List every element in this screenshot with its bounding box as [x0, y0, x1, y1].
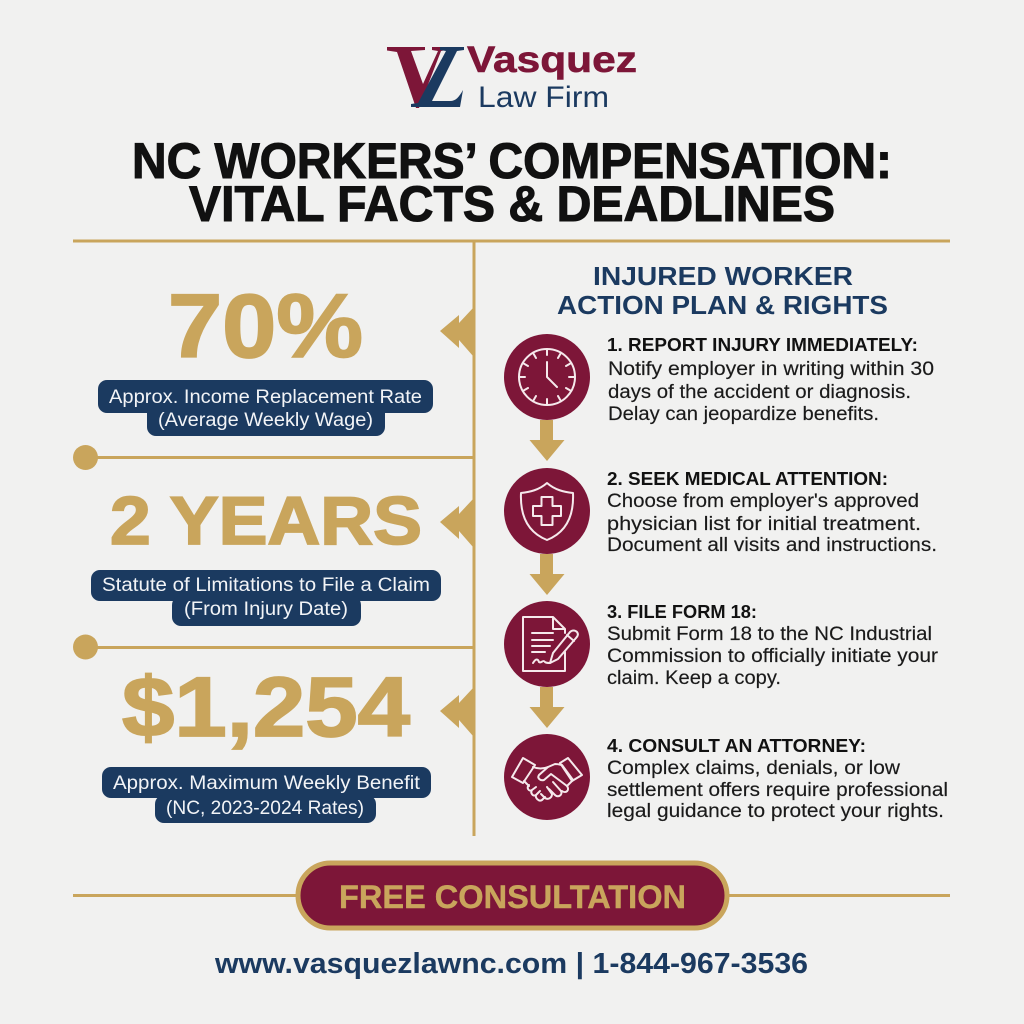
title: NC WORKERS’ COMPENSATION:	[132, 133, 892, 189]
panel: stat $1,254	[102, 660, 473, 823]
stat label: (Average Weekly Wage)	[158, 410, 373, 431]
title	[132, 133, 892, 232]
stat label	[102, 767, 431, 823]
stat label: Approx. Maximum Weekly Benefit	[113, 773, 421, 794]
step 4 text: Complex claims, denials, or low	[607, 758, 900, 779]
stat number: $1,254	[122, 660, 410, 754]
heading: action plan: ACTION PLAN & RIGHTS	[557, 290, 888, 320]
step 4 text	[607, 735, 948, 822]
step 3 text: Commission to officially initiate your	[607, 646, 939, 667]
logo	[387, 39, 637, 114]
stat label: (NC, 2023-2024 Rates)	[166, 798, 364, 819]
logo mark: VL monogram	[387, 47, 464, 108]
step 2 text: 2. SEEK MEDICAL ATTENTION:	[607, 468, 888, 489]
stat number: 2 YEARS	[110, 483, 422, 559]
step 4 text: 4. CONSULT AN ATTORNEY:	[607, 735, 866, 756]
step 4 text: legal guidance to protect your rights.	[607, 801, 944, 822]
arrow pointing to stat	[440, 499, 473, 547]
title: VITAL FACTS & DEADLINES	[189, 176, 835, 232]
step 1 icon: clock	[504, 334, 590, 420]
step 2 text: Document all visits and instructions.	[607, 535, 937, 556]
step 3 text	[607, 601, 939, 689]
step 1 text: 1. REPORT INJURY IMMEDIATELY:	[607, 334, 918, 355]
stat label	[98, 380, 433, 436]
heading: action plan	[557, 261, 888, 320]
step 1 text: Notify employer in writing within 30	[608, 359, 934, 380]
step 2 text: Choose from employer's approved	[607, 491, 919, 512]
heading: action plan: INJURED WORKER	[593, 261, 853, 291]
stat label	[91, 570, 441, 626]
flow arrow 2	[530, 554, 564, 595]
step 3 text: Submit Form 18 to the NC Industrial	[607, 624, 932, 645]
step 3 icon: form and pen	[504, 601, 590, 687]
panel: stat 70%	[98, 277, 473, 436]
arrow pointing to stat	[440, 688, 473, 736]
flow arrow 3	[530, 687, 564, 728]
step 2 text: physician list for initial treatment.	[607, 514, 921, 535]
step 3 text: claim. Keep a copy.	[607, 668, 781, 689]
arrow pointing to stat	[440, 308, 473, 356]
stat label: Approx. Income Replacement Rate	[109, 387, 422, 408]
panel: stat 2 years	[91, 483, 473, 626]
step 1 text: days of the accident or diagnosis.	[608, 382, 911, 403]
flow arrow 1	[530, 420, 564, 461]
logo wordmark: Vasquez	[467, 39, 637, 80]
step 4 text: settlement offers require professional	[607, 780, 948, 801]
call to action: FREE CONSULTATION	[339, 879, 686, 915]
step 4 icon: handshake	[504, 734, 590, 820]
stat label: (From Injury Date)	[184, 599, 348, 620]
step 3 text: 3. FILE FORM 18:	[607, 601, 757, 622]
stat number: 70%	[168, 277, 363, 377]
step 2 text	[607, 468, 937, 556]
gold frame lines	[73, 240, 950, 836]
logo wordmark: Law Firm	[478, 81, 609, 114]
step 1 text: Delay can jeopardize benefits.	[608, 404, 879, 425]
call to action	[73, 863, 950, 928]
stat label: Statute of Limitations to File a Claim	[102, 575, 430, 596]
step 1 text	[607, 334, 934, 425]
step 2 icon: medical shield	[504, 468, 590, 554]
logo wordmark	[467, 39, 637, 114]
contact line: www.vasquezlawnc.com | 1-844-967-3536	[214, 948, 808, 980]
